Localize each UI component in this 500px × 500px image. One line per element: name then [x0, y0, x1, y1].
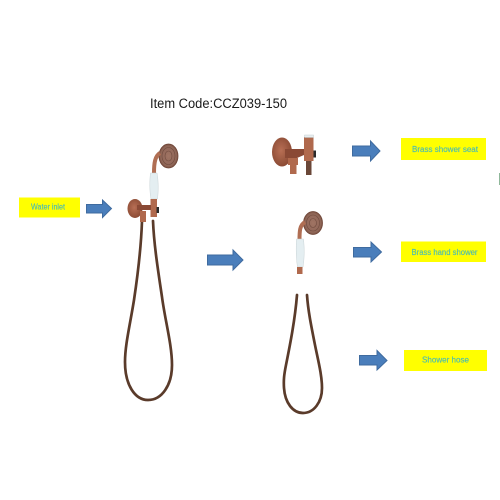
label: brass hand shower: Brass hand shower: [412, 248, 478, 257]
seat lower outlet: [288, 158, 298, 174]
product: shower hose: [284, 295, 322, 413]
arrow: to water inlet: [86, 200, 112, 218]
arrow: breakdown: [208, 250, 243, 270]
label: brass hand shower: [401, 242, 486, 262]
hand shower white handle: [150, 173, 158, 199]
seat arm: [285, 149, 304, 158]
label: brass shower seat: Brass shower seat: [412, 145, 479, 154]
seat knob: [156, 207, 159, 213]
label: brass shower seat: [401, 138, 486, 160]
product: complete shower set: [125, 144, 178, 400]
title: Item Code:CCZ039-150: [150, 96, 287, 111]
white cap: [304, 135, 314, 138]
brass collar: [297, 267, 302, 274]
seat outlet: [140, 211, 146, 222]
seat wall disc: [128, 199, 142, 218]
handle collar: [150, 199, 157, 217]
arrow: hand shower: [354, 242, 382, 262]
neck: [300, 222, 305, 240]
arrow: hose: [360, 350, 387, 370]
product: brass hand shower: [296, 212, 322, 274]
label: shower hose: Shower hose: [422, 356, 470, 364]
product: brass shower seat: [272, 135, 316, 175]
seat body: [137, 205, 151, 210]
hand shower neck: [154, 153, 160, 173]
black knob: [314, 150, 316, 158]
valve body: [304, 137, 314, 161]
label: shower hose: [404, 350, 487, 371]
icon: hand shower head: [159, 144, 178, 168]
label: water inlet: Water inlet: [31, 202, 66, 212]
hose stub: [306, 161, 312, 175]
arrow: seat: [352, 141, 380, 161]
hose: complete set: [125, 221, 172, 400]
white handle: [296, 239, 304, 267]
head: [304, 212, 322, 234]
label: water inlet: [19, 198, 80, 218]
seat disc: [272, 138, 292, 166]
